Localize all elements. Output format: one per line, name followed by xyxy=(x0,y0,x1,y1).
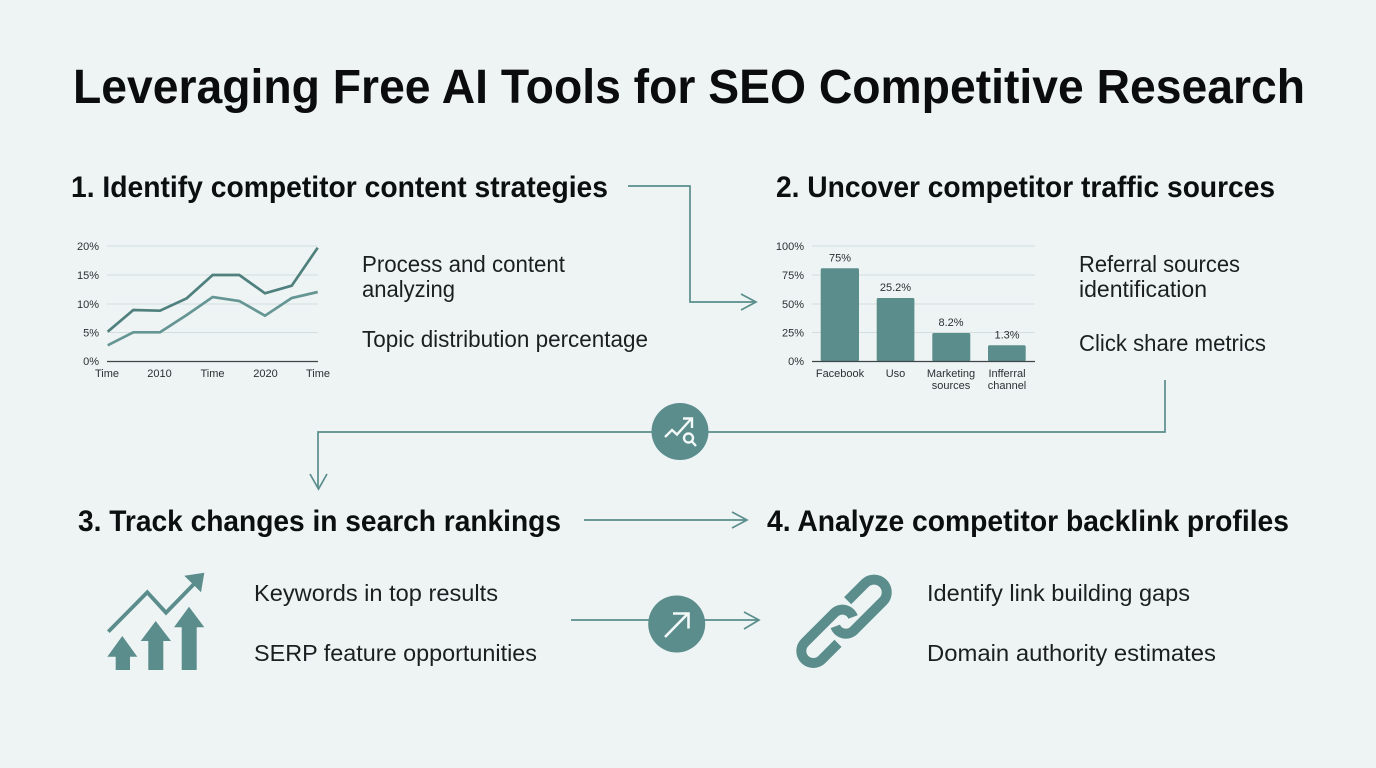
text: step 1 points xyxy=(362,251,648,352)
panel: step 3 xyxy=(78,505,561,670)
bar chart: traffic sources: Uso xyxy=(886,368,905,380)
heading: step 2: 2. Uncover competitor traffic sources xyxy=(776,171,1275,204)
heading: step 4: 4. Analyze competitor backlink profiles xyxy=(767,505,1289,538)
bar chart: traffic sources: 8.2% xyxy=(938,317,964,329)
bar chart: traffic sources: Marketing xyxy=(927,368,975,380)
icon: chain link xyxy=(801,580,887,663)
bar chart: traffic sources: 75% xyxy=(829,252,851,264)
title: Leveraging Free AI Tools for SEO Competitive Research xyxy=(73,61,1305,114)
bar chart: traffic sources xyxy=(776,241,1035,392)
bar chart: traffic sources: channel xyxy=(988,380,1026,392)
line chart: content strategies: 2010 xyxy=(147,368,172,380)
bar chart: traffic sources: 1.3% xyxy=(994,330,1020,342)
line chart: content strategies xyxy=(77,241,330,380)
text: step 2 points: Referral sources xyxy=(1079,251,1240,277)
line chart: content strategies: Time xyxy=(95,368,119,380)
text: step 4 points: Identify link building gaps xyxy=(927,580,1190,606)
line chart: content strategies: 10% xyxy=(77,299,99,311)
panel: step 1 xyxy=(71,171,648,380)
text: step 3 points: SERP feature opportunities xyxy=(254,640,537,666)
bar chart: traffic sources: Facebook xyxy=(816,368,865,380)
text: step 3 points xyxy=(254,580,537,666)
icon: trend with magnifier xyxy=(652,403,708,460)
panel: step 4 xyxy=(767,505,1289,666)
text: step 3 points: Keywords in top results xyxy=(254,580,498,606)
text: step 2 points: Click share metrics xyxy=(1079,330,1266,356)
text: step 1 points: Topic distribution percentage xyxy=(362,326,648,352)
text: step 2 points xyxy=(1079,251,1266,356)
heading: step 1: 1. Identify competitor content strategies xyxy=(71,171,608,204)
bar chart: traffic sources: Infferral xyxy=(988,368,1026,380)
line chart: content strategies: Time xyxy=(306,368,330,380)
bar chart: traffic sources: 50% xyxy=(782,299,804,311)
arrow: step 1 to step 2 xyxy=(628,186,756,310)
bar chart: traffic sources: 25% xyxy=(782,328,804,340)
bar chart: traffic sources: 100% xyxy=(776,241,804,253)
arrow: step 3 to step 4 xyxy=(584,512,747,528)
text: step 1 points: Process and content xyxy=(362,251,566,277)
panel: step 2 xyxy=(776,171,1275,392)
arrow: step 2 to step 3 xyxy=(310,380,1165,489)
arrow: lower connector with icon xyxy=(571,596,759,652)
text: step 2 points: identification xyxy=(1079,276,1207,302)
line chart: content strategies: 2020 xyxy=(253,368,278,380)
line chart: content strategies: 15% xyxy=(77,270,99,282)
bar chart: traffic sources: 25.2% xyxy=(880,282,911,294)
text: step 1 points: analyzing xyxy=(362,276,455,302)
line chart: content strategies: 20% xyxy=(77,241,99,253)
text: step 4 points: Domain authority estimates xyxy=(927,640,1216,666)
line chart: content strategies: 0% xyxy=(83,356,99,368)
line chart: content strategies: 5% xyxy=(83,328,99,340)
icon: rising chart with up arrows xyxy=(107,573,204,670)
line chart: content strategies: Time xyxy=(200,368,225,380)
bar chart: traffic sources: sources xyxy=(932,380,971,392)
bar chart: traffic sources: 75% xyxy=(782,270,804,282)
text: step 4 points xyxy=(927,580,1216,666)
bar chart: traffic sources: 0% xyxy=(788,356,804,368)
heading: step 3: 3. Track changes in search rankings xyxy=(78,505,561,538)
